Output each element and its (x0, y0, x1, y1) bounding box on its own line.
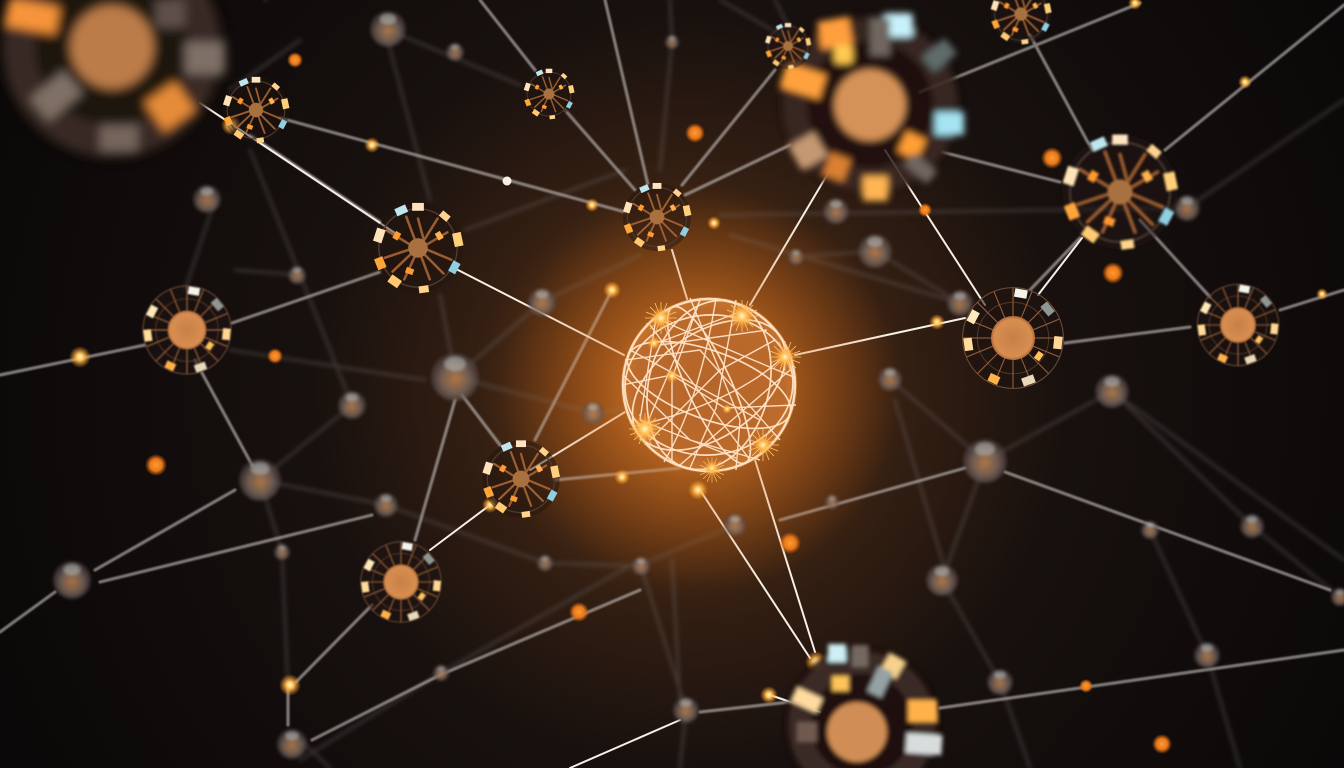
node: bottom large disk (784, 644, 943, 768)
node: top large blurred disk (779, 13, 964, 201)
central glow behind sphere (500, 190, 900, 590)
node: lower left disk (361, 542, 441, 622)
node: small disk near top disk (765, 23, 811, 69)
bright links into the central sphere (200, 103, 1082, 768)
node: far right disk (1197, 284, 1279, 366)
node: top left sharp disk (223, 77, 289, 143)
node: top right small disk (991, 0, 1052, 45)
node: disk above sphere (623, 183, 691, 251)
node: disk left of sphere (373, 203, 464, 293)
node: far left disk (143, 286, 231, 374)
node: top-left blurred disk (0, 0, 225, 160)
node: right upper disk (1062, 134, 1178, 250)
node: disk lower left of sphere (482, 440, 560, 518)
central wireframe sphere (609, 286, 809, 484)
node: small top disk (524, 69, 575, 119)
node: right centre sharp disk (963, 288, 1063, 388)
